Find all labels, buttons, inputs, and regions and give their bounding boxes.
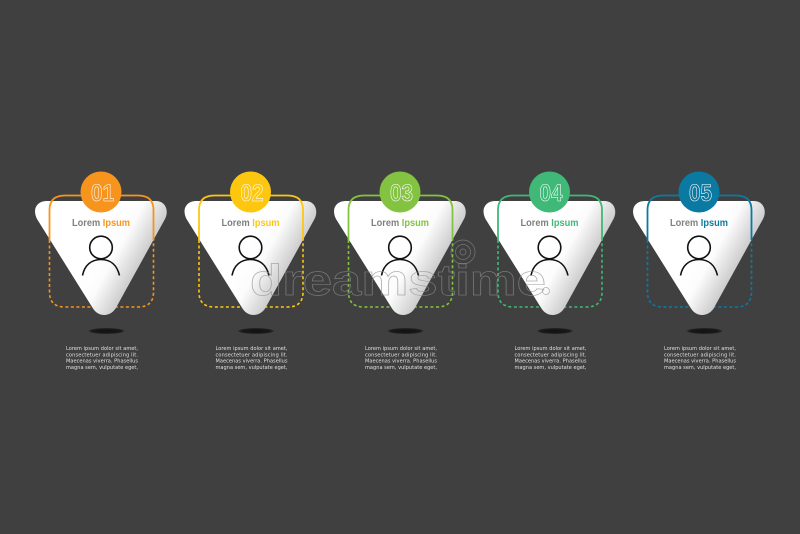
step 01 — [35, 172, 167, 371]
watermark registered mark — [542, 288, 550, 294]
number badge: 05 — [689, 180, 712, 207]
dashed lower frame — [50, 240, 154, 307]
triangle card — [185, 201, 316, 315]
number badge: 02 — [240, 180, 264, 207]
number badge — [380, 172, 420, 212]
description: Maecenas viverra. Phasellus — [66, 358, 138, 364]
dashed lower frame — [648, 240, 752, 307]
icon: person — [531, 236, 568, 276]
watermark — [250, 240, 550, 305]
description: magna sem, vulputate eget, — [216, 365, 288, 371]
description: magna sem, vulputate eget, — [664, 365, 736, 371]
description: Lorem ipsum dolor sit amet, — [365, 346, 437, 352]
description: Maecenas viverra. Phasellus — [216, 358, 288, 364]
solid upper frame — [199, 196, 303, 240]
number badge: 03 — [390, 180, 413, 207]
step 04 — [484, 172, 615, 371]
solid upper frame — [50, 196, 154, 240]
description — [66, 346, 138, 371]
heading: Lorem Ipsum — [371, 218, 429, 229]
watermark spiral logo — [451, 240, 475, 264]
description: Maecenas viverra. Phasellus — [365, 358, 437, 364]
description — [365, 346, 437, 371]
dashed lower frame — [348, 240, 452, 307]
dashed lower frame — [498, 240, 602, 307]
floating shadow — [537, 328, 573, 334]
description: Lorem ipsum dolor sit amet, — [664, 346, 736, 352]
heading: Lorem Ipsum — [670, 218, 728, 229]
description: Lorem ipsum dolor sit amet, — [66, 346, 138, 352]
description: consectetuer adipiscing lit. — [365, 352, 437, 358]
description: consectetuer adipiscing lit. — [66, 352, 138, 358]
floating shadow — [686, 328, 722, 334]
number badge: 04 — [540, 180, 563, 207]
icon: person — [232, 236, 269, 276]
solid upper frame — [648, 196, 752, 240]
triangle card — [35, 201, 167, 315]
step 03 — [334, 172, 466, 371]
step 02 — [185, 172, 316, 371]
description: magna sem, vulputate eget, — [365, 365, 437, 371]
triangle card — [633, 201, 765, 315]
number badge: 01 — [91, 180, 114, 207]
heading: Lorem Ipsum — [72, 218, 130, 229]
solid upper frame — [348, 196, 452, 240]
description — [216, 346, 288, 371]
description: magna sem, vulputate eget, — [66, 365, 138, 371]
description — [514, 346, 587, 371]
description: consectetuer adipiscing lit. — [514, 352, 587, 358]
heading: Lorem Ipsum — [520, 218, 579, 229]
floating shadow — [88, 328, 124, 334]
description: consectetuer adipiscing lit. — [664, 352, 736, 358]
floating shadow — [238, 328, 274, 334]
number badge — [230, 172, 271, 212]
triangle card — [334, 201, 466, 315]
description — [664, 346, 736, 371]
watermark: dreamstime — [250, 256, 546, 305]
description: consectetuer adipiscing lit. — [216, 352, 288, 358]
heading: Lorem Ipsum — [222, 218, 280, 229]
description: Maecenas viverra. Phasellus — [664, 358, 736, 364]
description: Lorem ipsum dolor sit amet, — [216, 346, 288, 352]
number badge — [529, 172, 570, 212]
description: magna sem, vulputate eget, — [514, 365, 587, 371]
number badge — [678, 172, 720, 212]
floating shadow — [388, 328, 424, 334]
icon: person — [82, 236, 120, 276]
description: Maecenas viverra. Phasellus — [514, 358, 587, 364]
number badge — [80, 172, 122, 212]
icon: person — [680, 236, 718, 276]
dashed lower frame — [199, 240, 303, 307]
step 05 — [633, 172, 765, 371]
icon: person — [382, 236, 418, 276]
description: Lorem ipsum dolor sit amet, — [514, 346, 587, 352]
solid upper frame — [498, 196, 602, 240]
triangle card — [484, 201, 615, 315]
